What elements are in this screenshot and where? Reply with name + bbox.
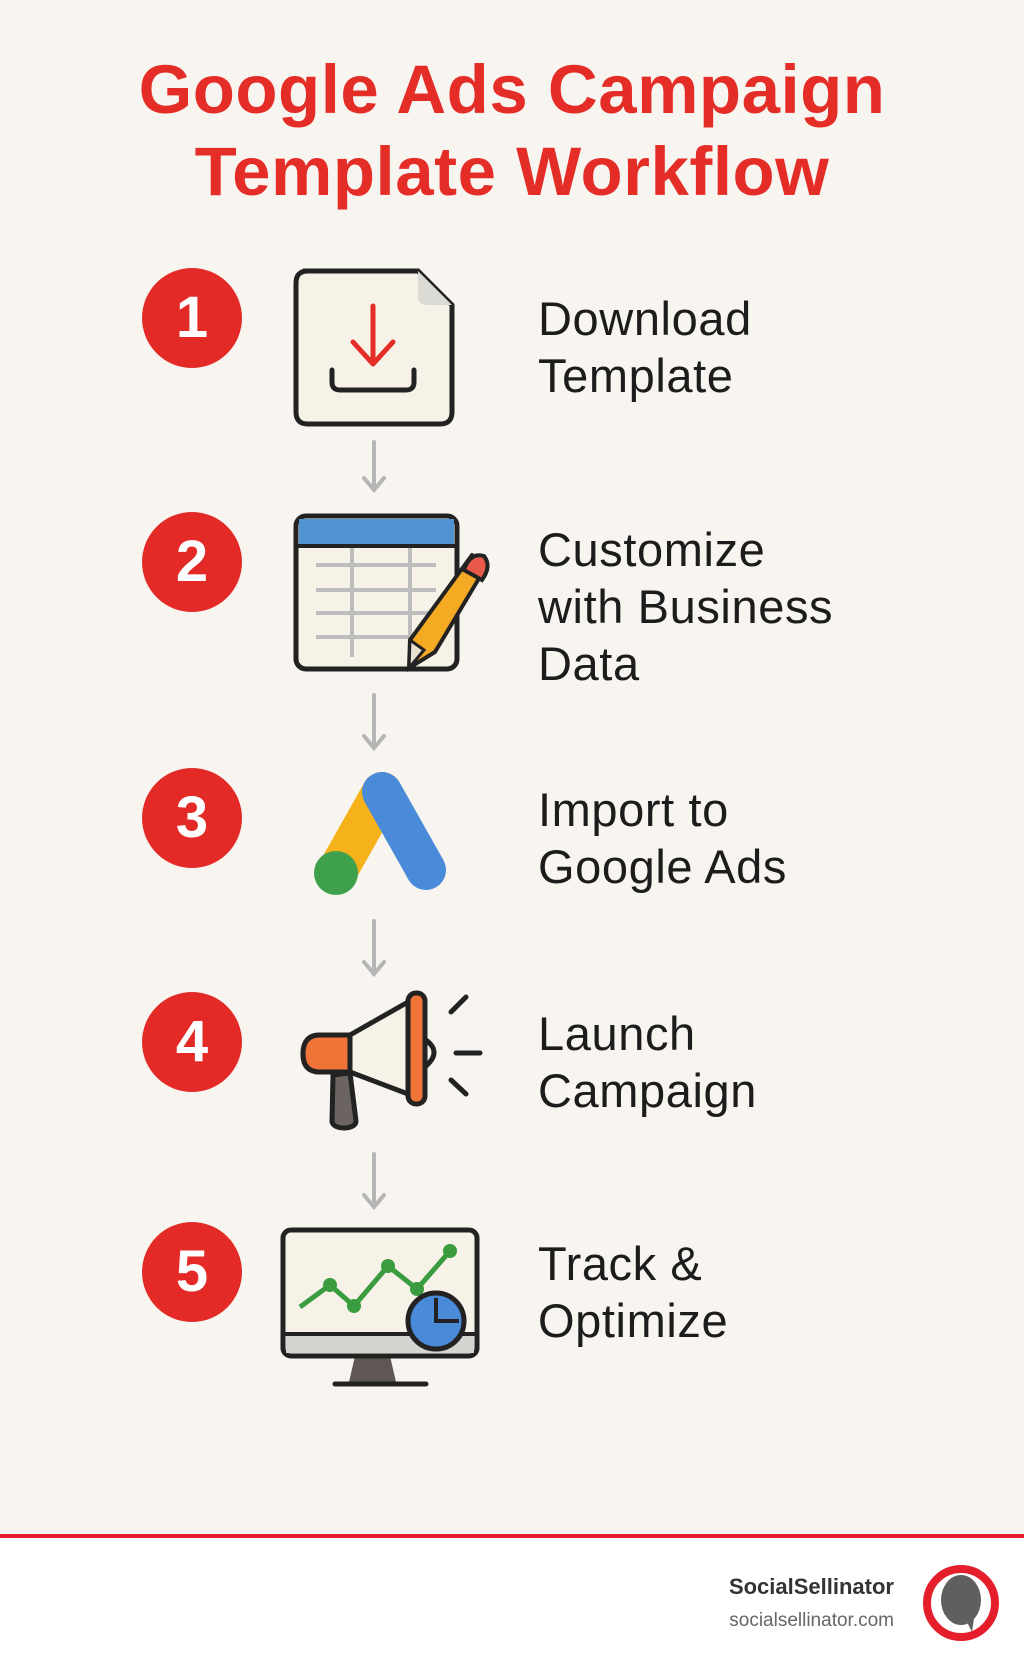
step 1 label (538, 292, 752, 402)
step 3 label (538, 783, 787, 893)
title: Template Workflow (195, 133, 829, 210)
step 2 label: Customize (538, 523, 765, 576)
step 2 label (538, 523, 833, 690)
brand url: socialsellinator.com (729, 1610, 894, 1631)
step 1 label: Template (538, 349, 734, 402)
step 5 label: Track & (538, 1237, 702, 1290)
step 3 label: Import to (538, 783, 729, 836)
step 3 number (142, 768, 242, 868)
step 1 label: Download (538, 292, 752, 345)
icon: megaphone (303, 993, 480, 1128)
arrow 2 (364, 695, 384, 748)
step 3 number: 3 (176, 785, 208, 850)
step 2 number: 2 (176, 529, 208, 594)
step 4 number (142, 992, 242, 1092)
icon: spreadsheet with pencil (296, 516, 488, 669)
step 4 number: 4 (176, 1009, 208, 1074)
step 4 label: Launch (538, 1007, 696, 1060)
icon: google ads logo (314, 792, 426, 895)
step 3 label: Google Ads (538, 840, 787, 893)
arrow 1 (364, 442, 384, 490)
step 4 label: Campaign (538, 1064, 757, 1117)
step 2 number (142, 512, 242, 612)
icon: download document (296, 271, 452, 424)
arrow 3 (364, 921, 384, 974)
arrow 4 (364, 1154, 384, 1207)
title: Google Ads Campaign (139, 51, 885, 128)
footer (0, 1534, 1024, 1670)
step 5 number (142, 1222, 242, 1322)
step 5 label (538, 1237, 728, 1347)
step 5 label: Optimize (538, 1294, 728, 1347)
step 1 number: 1 (176, 285, 208, 350)
icon: logo (923, 1565, 999, 1641)
step 2 label: with Business (538, 580, 833, 633)
step 4 label (538, 1007, 757, 1117)
step 2 label: Data (538, 637, 640, 690)
icon: analytics monitor (283, 1230, 477, 1384)
brand name: SocialSellinator (729, 1574, 894, 1599)
title (139, 51, 885, 210)
step 5 number: 5 (176, 1239, 208, 1304)
step 1 number (142, 268, 242, 368)
